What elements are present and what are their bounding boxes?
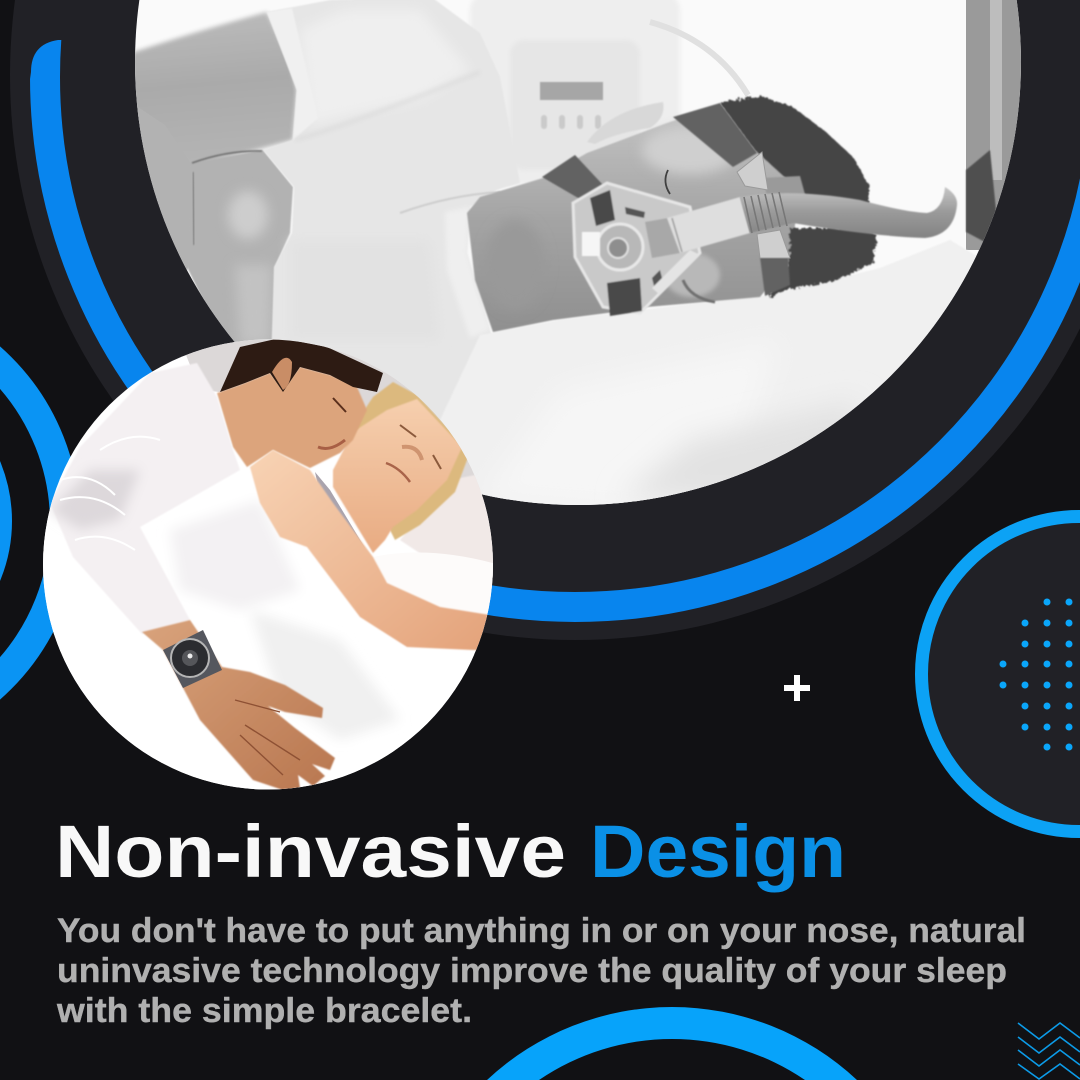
face and neck bbox=[467, 105, 800, 332]
small circle photo: couple asleep, man wearing bracelet bbox=[40, 335, 500, 800]
title bbox=[55, 810, 846, 893]
bottom blue arc bbox=[487, 1007, 857, 1080]
forearm behind bbox=[137, 106, 190, 270]
mask shell bbox=[573, 183, 700, 316]
woman's top strap bbox=[315, 472, 365, 548]
bent arm bbox=[187, 150, 293, 345]
temple bbox=[766, 175, 806, 194]
man's face and neck bbox=[217, 367, 367, 468]
chevron pattern bbox=[1018, 1023, 1080, 1079]
bracelet bbox=[163, 630, 222, 688]
description text bbox=[56, 912, 1026, 1030]
tube connector bbox=[645, 197, 750, 258]
man's hair bbox=[220, 338, 383, 392]
air hose bbox=[740, 187, 957, 238]
woman's facial features bbox=[386, 425, 441, 482]
left concentric blue rings bbox=[0, 303, 65, 743]
man's shirt sleeve bbox=[50, 363, 240, 634]
dot grid bbox=[1000, 598, 1072, 750]
woman's face and neck bbox=[333, 399, 462, 553]
duvet bbox=[43, 500, 493, 790]
man's facial features bbox=[318, 398, 346, 448]
title: Design bbox=[590, 810, 846, 893]
ear bbox=[587, 102, 663, 144]
icon: plus sign bbox=[784, 675, 810, 701]
woman's arm bbox=[250, 450, 490, 650]
mask straps bbox=[542, 103, 790, 296]
dark ring behind main photo bbox=[10, 0, 1080, 640]
man's hand and wrist bbox=[142, 620, 335, 790]
bedding behind heads bbox=[186, 340, 475, 478]
pillow right bbox=[400, 475, 493, 578]
upper arm bbox=[125, 12, 297, 168]
window and wall strip bbox=[966, 0, 1022, 250]
breathing machine bbox=[470, 0, 748, 184]
pillow bbox=[441, 241, 976, 505]
description text: You don't have to put anything in or on your nose, natural bbox=[57, 912, 1026, 950]
white T-shirt bbox=[264, 0, 519, 420]
man's ear bbox=[272, 358, 292, 390]
right circle with blue ring bbox=[922, 516, 1080, 832]
woman's hair bbox=[353, 382, 470, 540]
blue arc around main photo bbox=[45, 0, 1080, 607]
main photo: man asleep wearing CPAP mask bbox=[120, 0, 1030, 520]
hair bbox=[720, 96, 877, 297]
description text: uninvasive technology improve the quality of your sleep bbox=[57, 952, 1007, 990]
description text: with the simple bracelet. bbox=[56, 992, 472, 1030]
forehead pads bbox=[737, 152, 790, 258]
title: Non-invasive bbox=[55, 810, 566, 893]
